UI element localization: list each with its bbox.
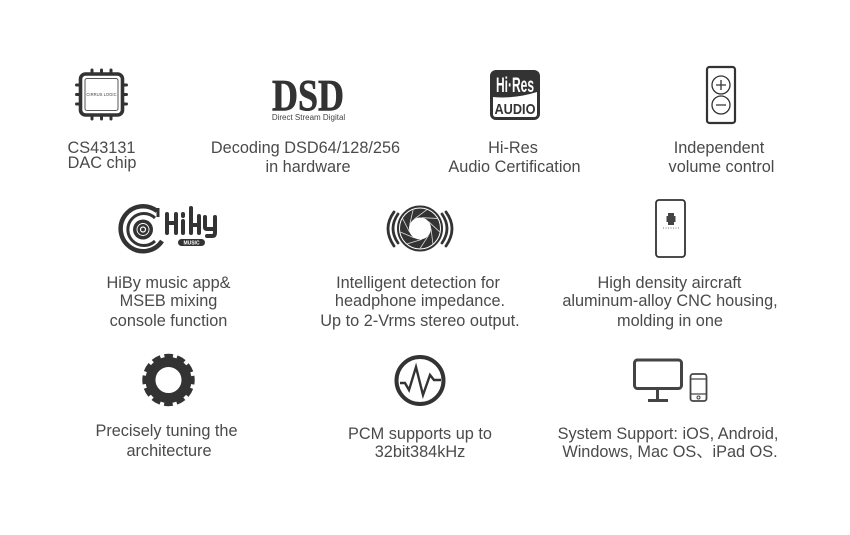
icon: DSD logo: DSD bbox=[272, 71, 344, 120]
icon: chip: CIRRUS LOGIC bbox=[86, 92, 117, 97]
feature: impedance detection bbox=[320, 206, 520, 330]
feature: DAC chip bbox=[68, 70, 136, 172]
label: DAC chip: DAC chip bbox=[68, 154, 136, 172]
label: impedance detection: headphone impedance. bbox=[335, 292, 505, 310]
icon: player front bbox=[656, 200, 685, 257]
label: tuning architecture: architecture bbox=[126, 442, 212, 460]
label: PCM support: PCM supports up to bbox=[348, 425, 492, 443]
label: impedance detection: Up to 2-Vrms stereo output. bbox=[320, 312, 520, 330]
icon: monitor and phone bbox=[634, 360, 707, 401]
label: CNC housing: High density aircraft bbox=[598, 274, 742, 292]
label: tuning architecture: Precisely tuning the bbox=[95, 422, 238, 440]
label: PCM support bbox=[348, 425, 492, 461]
label: system support: Windows, Mac OS、iPad OS. bbox=[562, 443, 778, 461]
label: volume control: Independent bbox=[674, 139, 765, 157]
label: Hi-Res certification: Audio Certification bbox=[448, 158, 581, 176]
label: Hi-Res certification bbox=[448, 139, 581, 176]
label: volume control: volume control bbox=[669, 158, 774, 176]
label: impedance detection: Intelligent detection for bbox=[336, 274, 500, 292]
label: DSD decoding bbox=[211, 139, 400, 176]
feature: HiBy music app bbox=[107, 206, 231, 330]
label: system support: System Support: iOS, Android, bbox=[558, 425, 778, 443]
icon: HiBy music logo: MUSIC bbox=[183, 240, 200, 246]
label: Hi-Res certification: Hi-Res bbox=[488, 139, 538, 157]
feature: PCM support bbox=[348, 357, 492, 461]
icon: Hi-Res Audio badge: AUDIO bbox=[494, 101, 536, 118]
label: HiBy music app: MSEB mixing bbox=[120, 292, 217, 310]
icon: Hi-Res Audio badge: Hi·Res bbox=[496, 74, 534, 97]
label: DSD decoding: in hardware bbox=[265, 158, 351, 176]
label: CNC housing: aluminum-alloy CNC housing, bbox=[562, 292, 778, 310]
icon: waveform circle bbox=[396, 357, 444, 404]
feature: system support bbox=[558, 360, 778, 461]
label: HiBy music app: console function bbox=[110, 312, 227, 330]
feature: volume control bbox=[669, 67, 774, 176]
label: DAC chip: CS43131 bbox=[68, 139, 135, 157]
icon: DSD logo: Direct Stream Digital bbox=[272, 113, 345, 122]
icon: shutter with sound waves bbox=[388, 206, 452, 250]
icon: Hi-Res Audio badge bbox=[490, 70, 540, 120]
label: CNC housing bbox=[562, 274, 778, 330]
icon: gear bbox=[144, 356, 192, 404]
label: system support bbox=[558, 425, 778, 461]
label: DSD decoding: Decoding DSD64/128/256 bbox=[211, 139, 400, 157]
feature: tuning architecture bbox=[95, 356, 238, 460]
label: tuning architecture bbox=[95, 422, 238, 460]
label: HiBy music app bbox=[107, 274, 231, 330]
feature: Hi-Res certification bbox=[448, 70, 581, 176]
label: PCM support: 32bit384kHz bbox=[375, 443, 465, 461]
label: DAC chip bbox=[68, 139, 136, 172]
label: HiBy music app: HiBy music app& bbox=[107, 274, 231, 292]
label: volume control bbox=[669, 139, 774, 176]
icon: volume buttons bbox=[707, 67, 735, 123]
label: impedance detection bbox=[320, 274, 520, 330]
label: CNC housing: molding in one bbox=[617, 312, 723, 330]
feature: CNC housing bbox=[562, 200, 778, 330]
feature: DSD decoding bbox=[211, 71, 400, 176]
